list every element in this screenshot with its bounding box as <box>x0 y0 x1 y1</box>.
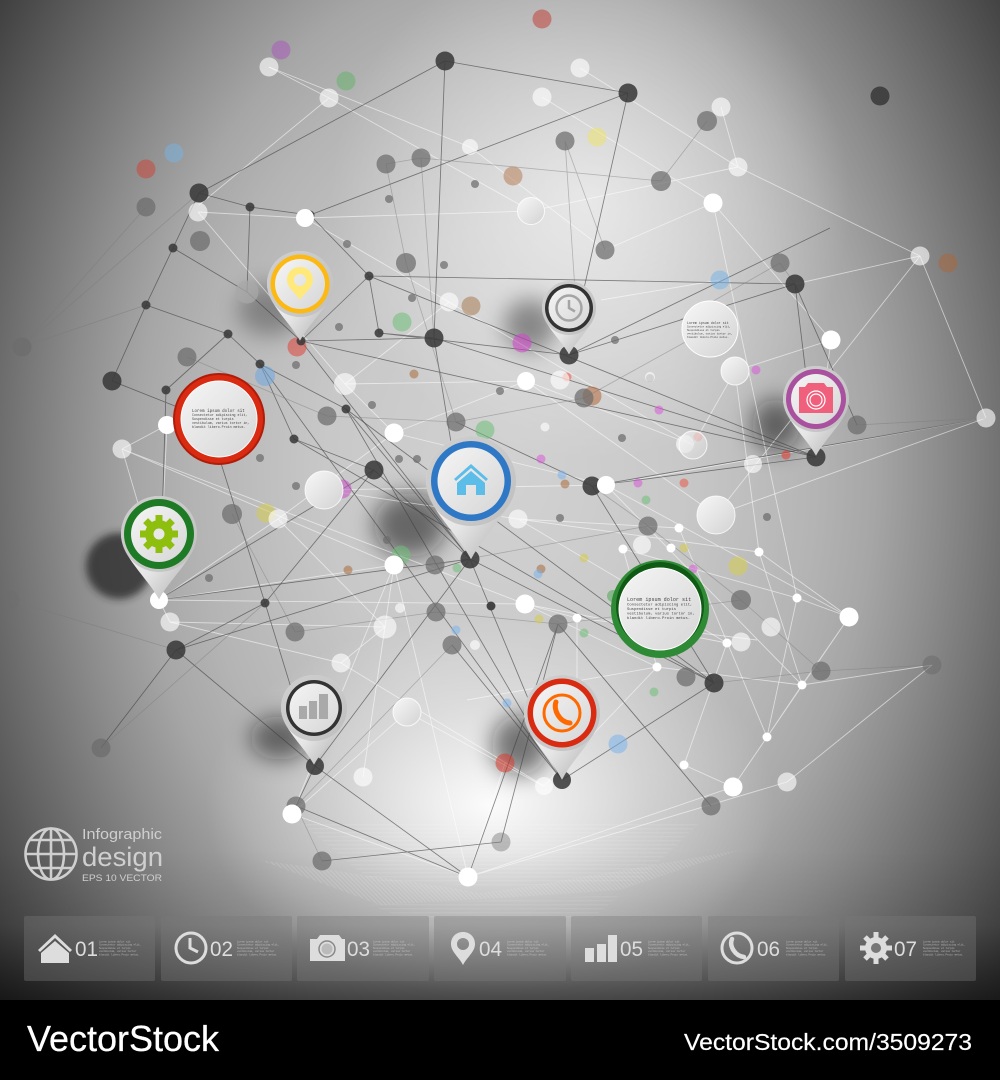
panel: 01 home: Suspendisse et turpis <box>99 947 131 950</box>
panel: 06 phone: Consectetur adipiscing elit, <box>786 944 828 947</box>
icon: phone <box>722 933 752 963</box>
pin: location <box>267 251 333 341</box>
panel: 07 gear: Lorem ipsum dolor sit <box>923 940 955 944</box>
icon: gear <box>860 932 892 964</box>
icon: bars <box>299 694 328 719</box>
text bubble: green: Consectetur adipiscing elit, <box>627 602 692 608</box>
network: dark nodes <box>102 52 890 789</box>
panel: 07 gear: blandit libero.Proin metus. <box>923 953 964 956</box>
footer bar: VectorStock <box>27 1018 220 1059</box>
panel: 06 phone: blandit libero.Proin metus. <box>786 953 827 956</box>
text bubble: white: vestibulum, varius tortor in, <box>687 332 732 336</box>
panel: 05 bars: 05 <box>620 937 643 961</box>
panel: 04 location: Suspendisse et turpis <box>507 947 539 950</box>
text bubble: white: Lorem ipsum dolor sit <box>687 321 729 325</box>
panel: 07 gear: Suspendisse et turpis <box>923 947 955 950</box>
panel: 01 home: vestibulum, varius tortor <box>99 950 137 953</box>
text bubble: white <box>682 301 738 357</box>
panel: 06 phone: vestibulum, varius tortor <box>786 950 824 953</box>
panel: 03 camera: 03 <box>347 937 370 961</box>
panel: 03 camera: blandit libero.Proin metus. <box>373 953 414 956</box>
pin: chart <box>281 675 347 765</box>
panel: 07 gear <box>845 916 976 981</box>
icon: bars <box>585 935 617 962</box>
icon: globe <box>26 828 77 880</box>
text bubble: red: Suspendisse et turpis <box>192 417 234 421</box>
text bubble: red: vestibulum, varius tortor in, <box>192 421 249 425</box>
pin: phone <box>524 675 600 780</box>
text bubble: green: Lorem ipsum dolor sit <box>627 597 691 603</box>
text bubble: green: Suspendisse et turpis <box>627 607 677 612</box>
icon: camera <box>799 383 833 413</box>
text bubble: green: vestibulum, varius tortor in, <box>627 612 695 616</box>
text bubble: white: Consectetur adipiscing elit, <box>687 324 731 328</box>
logo: Infographic design: design <box>82 842 163 872</box>
panel: 02 clock: blandit libero.Proin metus. <box>237 953 278 956</box>
panel: 05 bars: Lorem ipsum dolor sit <box>648 940 680 944</box>
pin: camera <box>783 366 849 456</box>
panel: 04 location: Consectetur adipiscing elit, <box>507 944 549 947</box>
panel: 02 clock: 02 <box>210 937 233 961</box>
logo: Infographic design: EPS 10 VECTOR <box>82 873 162 884</box>
panel: 04 location: vestibulum, varius tortor <box>507 950 545 953</box>
panel: 01 home: Consectetur adipiscing elit, <box>99 944 141 947</box>
icon: clock <box>556 296 582 320</box>
floor reflection wedge <box>260 822 740 920</box>
panel: 06 phone: Lorem ipsum dolor sit <box>786 940 818 944</box>
network: dark links <box>101 61 986 877</box>
panel: 02 clock: Lorem ipsum dolor sit <box>237 940 269 944</box>
panel: 05 bars: Consectetur adipiscing elit, <box>648 944 690 947</box>
panel: 01 home: blandit libero.Proin metus. <box>99 953 140 956</box>
text bubble: green: blandit libero.Proin metus. <box>627 616 690 621</box>
network: colored nodes <box>136 10 958 772</box>
panel: 07 gear: vestibulum, varius tortor <box>923 950 961 953</box>
text bubble: red <box>174 374 264 464</box>
text bubble: green <box>611 560 709 658</box>
panel: 02 clock: vestibulum, varius tortor <box>237 950 275 953</box>
panel: 04 location <box>434 916 566 981</box>
text bubble: red: blandit libero.Proin metus. <box>192 425 245 429</box>
panel: 05 bars <box>571 916 702 981</box>
text bubble: red: Lorem ipsum dolor sit <box>192 409 245 414</box>
panel: 04 location: Lorem ipsum dolor sit <box>507 940 539 944</box>
panel: 01 home <box>24 916 155 981</box>
icon: house <box>38 934 72 963</box>
icon: phone <box>544 695 580 731</box>
panel: 06 phone <box>708 916 839 981</box>
panel: 06 phone: Suspendisse et turpis <box>786 947 818 950</box>
icon: location marker <box>451 932 475 965</box>
panel: 04 location: 04 <box>479 937 502 961</box>
panel: 05 bars: Suspendisse et turpis <box>648 947 680 950</box>
network: white links <box>122 67 986 877</box>
pin: home <box>426 436 516 559</box>
panel: 02 clock <box>161 916 292 981</box>
panel: 03 camera: Consectetur adipiscing elit, <box>373 944 415 947</box>
panel: 02 clock: Consectetur adipiscing elit, <box>237 944 279 947</box>
icon: camera <box>310 935 345 961</box>
network: large spheres <box>236 198 749 726</box>
network: faint grey links <box>10 121 986 861</box>
icon: gear <box>140 515 178 553</box>
footer bar <box>0 1000 1000 1080</box>
panel: 05 bars: vestibulum, varius tortor <box>648 950 686 953</box>
pin shadows <box>86 284 800 775</box>
panel: 06 phone: 06 <box>757 937 780 961</box>
panel: 07 gear: 07 <box>894 937 917 961</box>
network: white nodes <box>112 58 996 886</box>
icon: house <box>454 464 488 495</box>
icon: clock <box>176 933 206 963</box>
logo: Infographic design <box>26 826 163 884</box>
logo: Infographic design: Infographic <box>82 826 163 843</box>
panel: 01 home: 01 <box>75 937 98 961</box>
footer bar: VectorStock.com/3509273 <box>684 1029 972 1055</box>
panel: 03 camera: Suspendisse et turpis <box>373 947 405 950</box>
panel: 03 camera: vestibulum, varius tortor <box>373 950 411 953</box>
pin: clock <box>542 281 596 354</box>
icon: location marker <box>287 267 313 300</box>
network: grey nodes <box>0 111 942 870</box>
text bubble: white: blandit libero.Proin metus. <box>687 335 729 339</box>
panel: 03 camera: Lorem ipsum dolor sit <box>373 940 405 944</box>
panel: 02 clock: Suspendisse et turpis <box>237 947 269 950</box>
panel: 03 camera <box>297 916 429 981</box>
panel: 04 location: blandit libero.Proin metus. <box>507 953 548 956</box>
pin: gear <box>121 496 197 599</box>
panel: 05 bars: blandit libero.Proin metus. <box>648 953 689 956</box>
panel: 07 gear: Consectetur adipiscing elit, <box>923 944 965 947</box>
panel: 01 home: Lorem ipsum dolor sit <box>99 940 131 944</box>
text bubble: white: Suspendisse et turpis <box>687 328 720 332</box>
text bubble: red: Consectetur adipiscing elit, <box>192 413 247 417</box>
